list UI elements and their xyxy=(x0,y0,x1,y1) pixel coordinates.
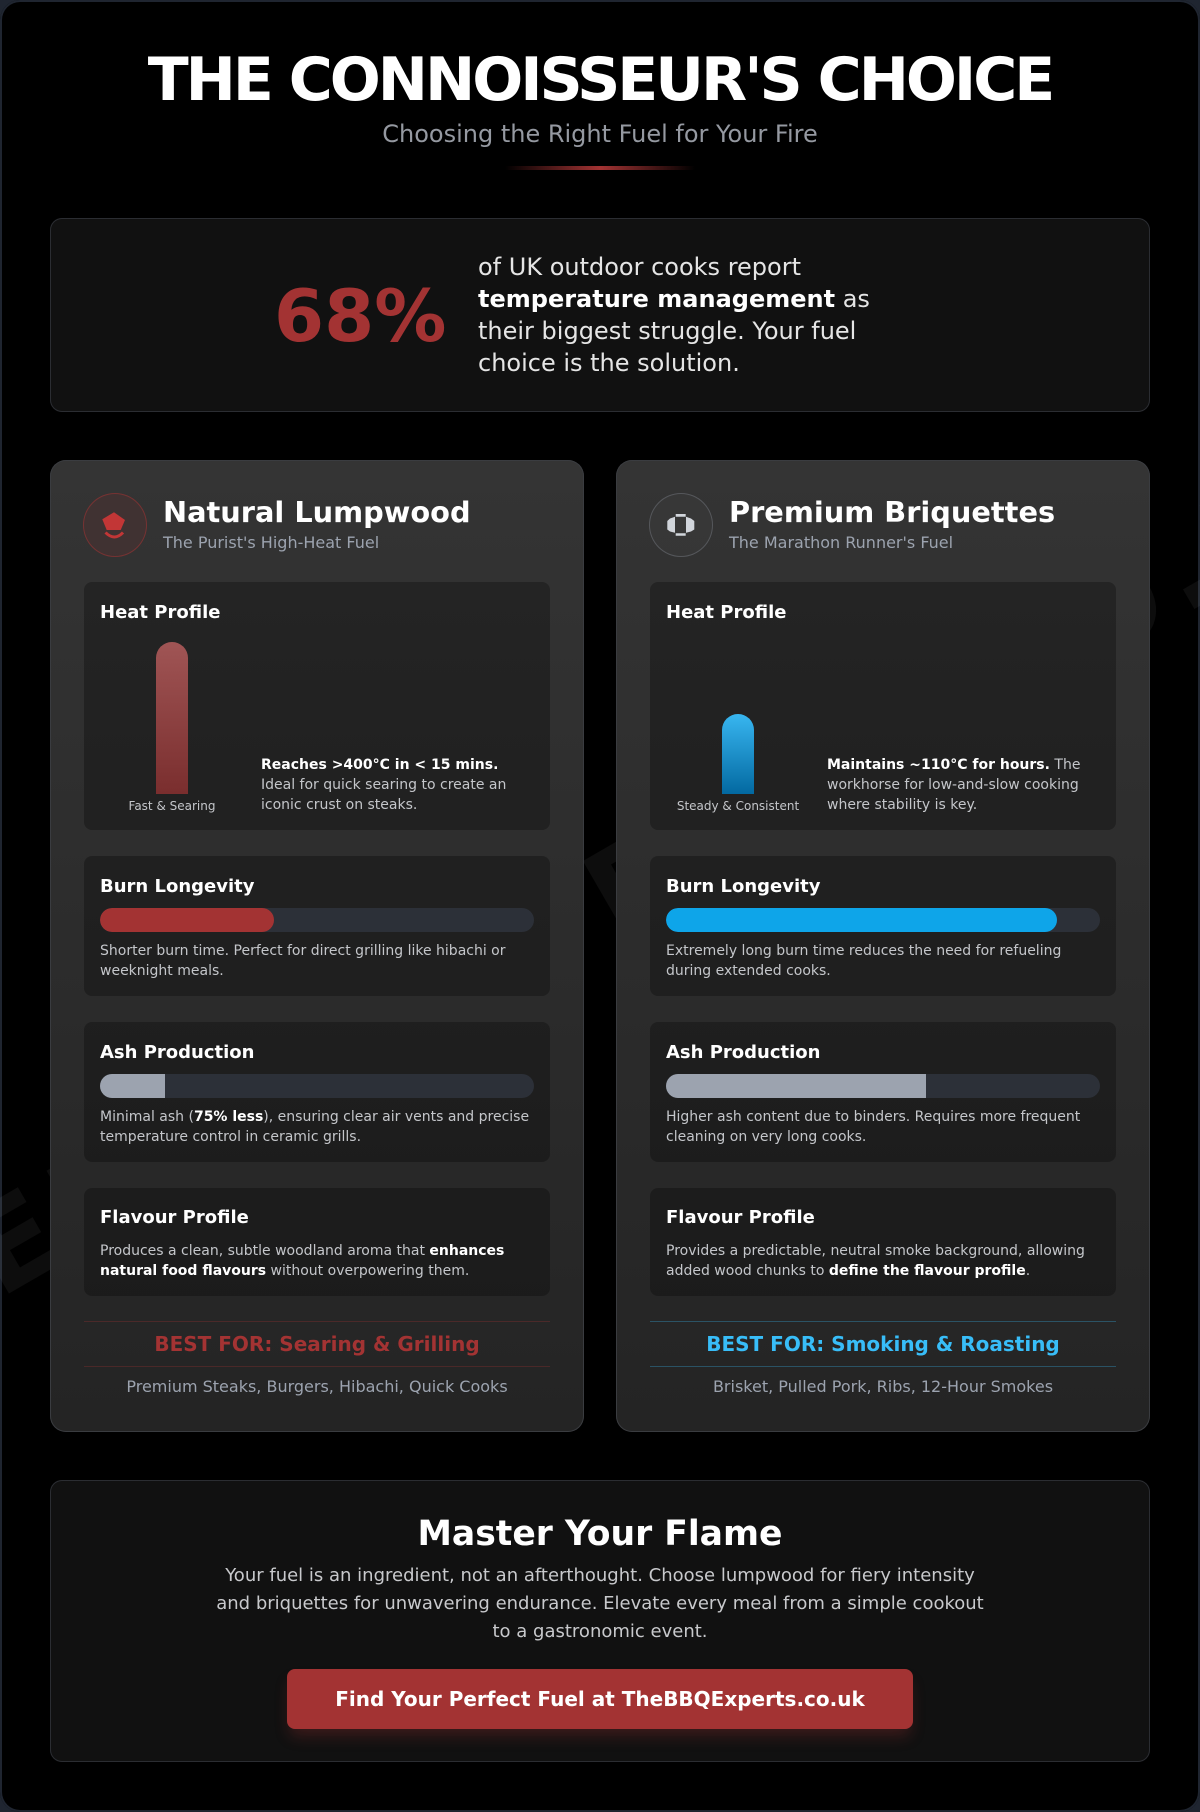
panel: briquettes burn longevity xyxy=(650,856,1116,996)
subtitle: Choosing the Right Fuel for Your Fire xyxy=(382,120,818,148)
panel: natural lumpwood xyxy=(50,460,584,1432)
panel: briquettes ash production xyxy=(650,1022,1116,1162)
statistic text: of UK outdoor cooks report xyxy=(478,253,801,281)
description: during extended cooks. xyxy=(666,963,831,979)
bar: 90 percent xyxy=(666,908,1100,932)
panel: lumpwood ash production xyxy=(84,1022,550,1162)
best for label: BEST FOR: Searing & Grilling xyxy=(154,1332,480,1356)
bar: 40 percent xyxy=(100,908,534,932)
description xyxy=(827,757,1080,813)
heat bar xyxy=(156,642,188,794)
description: Higher ash content due to binders. Requires more frequent xyxy=(666,1109,1080,1125)
call to action text: to a gastronomic event. xyxy=(492,1621,708,1642)
description: Extremely long burn time reduces the need for refueling xyxy=(666,943,1061,959)
panel: key statistic xyxy=(50,218,1150,412)
icon: briquette xyxy=(649,493,713,557)
statistic text: choice is the solution. xyxy=(478,349,740,377)
bar: 15 percent xyxy=(100,1074,534,1098)
call to action text: Your fuel is an ingredient, not an afterthought. Choose lumpwood for fiery intensity xyxy=(225,1565,975,1586)
lumpwood heading: Natural Lumpwood xyxy=(163,495,471,529)
description: Shorter burn time. Perfect for direct grilling like hibachi or xyxy=(100,943,506,959)
panel: lumpwood flavour profile xyxy=(84,1188,550,1296)
bar label: Fast & Searing xyxy=(129,799,215,813)
heading: Ash Production xyxy=(100,1042,254,1063)
description: natural food flavours without overpowering them. xyxy=(100,1263,469,1279)
call to action text: and briquettes for unwavering endurance. Elevate every meal from a simple cookout xyxy=(216,1593,984,1614)
description: added wood chunks to define the flavour profile. xyxy=(666,1263,1030,1279)
briquettes subheading: The Marathon Runner's Fuel xyxy=(729,533,953,552)
heat bar xyxy=(722,714,754,794)
best for label: BEST FOR: Smoking & Roasting xyxy=(706,1332,1060,1356)
description: iconic crust on steaks. xyxy=(261,797,417,813)
panel: call to action xyxy=(50,1480,1150,1762)
briquettes heading: Premium Briquettes xyxy=(729,495,1055,529)
panel: lumpwood burn longevity xyxy=(84,856,550,996)
description xyxy=(666,1109,1080,1145)
description: Maintains ~110°C for hours. The xyxy=(827,757,1080,773)
description xyxy=(261,757,506,813)
description xyxy=(100,1109,529,1145)
description: workhorse for low-and-slow cooking xyxy=(827,777,1079,793)
description: where stability is key. xyxy=(827,797,977,813)
heading: Heat Profile xyxy=(666,602,786,623)
call to action heading: Master Your Flame xyxy=(417,1514,782,1554)
description: weeknight meals. xyxy=(100,963,224,979)
lumpwood subheading: The Purist's High-Heat Fuel xyxy=(163,533,379,552)
best for examples: Brisket, Pulled Pork, Ribs, 12-Hour Smokes xyxy=(713,1377,1053,1396)
call to action button xyxy=(287,1669,913,1729)
call to action text xyxy=(216,1565,984,1642)
panel: briquettes flavour profile xyxy=(650,1188,1116,1296)
statistic number: 68% xyxy=(274,274,446,358)
description: Ideal for quick searing to create an xyxy=(261,777,506,793)
panel: lumpwood heat profile xyxy=(84,582,550,830)
description xyxy=(666,1243,1085,1279)
title divider xyxy=(505,166,695,170)
heading: Heat Profile xyxy=(100,602,220,623)
statistic text: their biggest struggle. Your fuel xyxy=(478,317,856,345)
description: cleaning on very long cooks. xyxy=(666,1129,866,1145)
description xyxy=(100,1243,504,1279)
description xyxy=(666,943,1061,979)
description: Minimal ash (75% less), ensuring clear air vents and precise xyxy=(100,1109,529,1125)
heading: Ash Production xyxy=(666,1042,820,1063)
heading: Burn Longevity xyxy=(100,876,254,897)
best for examples: Premium Steaks, Burgers, Hibachi, Quick Cooks xyxy=(126,1377,508,1396)
bar: 60 percent xyxy=(666,1074,1100,1098)
heading: Flavour Profile xyxy=(100,1207,249,1228)
call to action button: Find Your Perfect Fuel at TheBBQExperts.co.uk xyxy=(335,1687,865,1711)
panel: premium briquettes xyxy=(616,460,1150,1432)
statistic text xyxy=(478,253,870,377)
heading: Flavour Profile xyxy=(666,1207,815,1228)
statistic text: temperature management as xyxy=(478,285,870,313)
description: temperature control in ceramic grills. xyxy=(100,1129,361,1145)
icon: lumpwood xyxy=(83,493,147,557)
panel: briquettes heat profile xyxy=(650,582,1116,830)
description: Reaches >400°C in < 15 mins. xyxy=(261,757,498,773)
description: Provides a predictable, neutral smoke background, allowing xyxy=(666,1243,1085,1259)
description xyxy=(100,943,506,979)
description: Produces a clean, subtle woodland aroma that enhances xyxy=(100,1243,504,1259)
title: THE CONNOISSEUR'S CHOICE xyxy=(148,45,1052,115)
heading: Burn Longevity xyxy=(666,876,820,897)
bar label: Steady & Consistent xyxy=(677,799,799,813)
